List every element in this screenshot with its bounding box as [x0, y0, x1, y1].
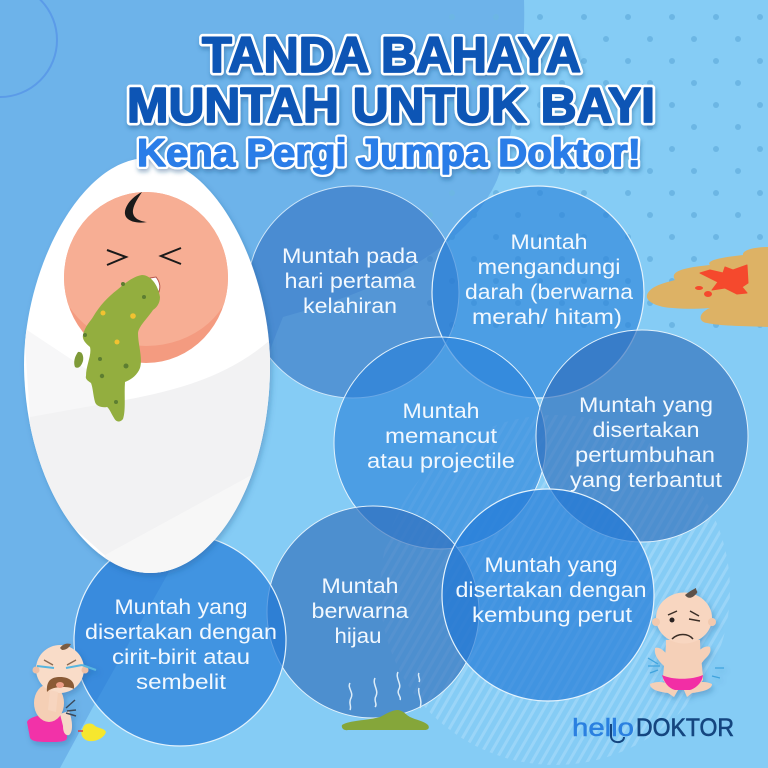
vomit drip — [74, 352, 83, 368]
potty — [27, 714, 67, 742]
subtitle outline: Kena Pergi Jumpa Doktor! — [137, 132, 641, 175]
head — [656, 592, 712, 644]
baby with bloated stomach — [648, 588, 724, 697]
face — [64, 192, 228, 363]
head — [36, 645, 84, 693]
stain: red on tan — [647, 247, 768, 327]
eyes and mouth — [668, 611, 700, 639]
text: hijau: hijau — [334, 625, 382, 648]
text: kembung: disertakan dengan — [456, 579, 646, 602]
face highlight above chin — [58, 192, 234, 346]
text: pertumbuhan: disertakan — [592, 419, 700, 442]
hair tuft — [60, 644, 71, 650]
circle: darah — [432, 186, 644, 398]
rubber duck — [78, 724, 106, 741]
text: cirit-birit: Muntah yang — [114, 596, 248, 619]
pain lines — [648, 658, 724, 678]
text: cirit-birit: sembelit — [136, 671, 226, 694]
hair — [125, 192, 147, 223]
vomit mound with steam — [342, 672, 429, 730]
text: hari pertama: kelahiran — [303, 295, 397, 318]
text: pertumbuhan: yang terbantut — [570, 469, 722, 492]
text: cirit-birit: cirit-birit atau — [112, 646, 250, 669]
text: darah: Muntah — [510, 231, 588, 254]
circle: kembung — [442, 489, 654, 701]
title line 1: TANDA BAHAYA — [202, 27, 581, 83]
decorative circle outline — [0, 0, 57, 97]
text: darah: mengandungi — [478, 256, 620, 279]
hair tuft — [685, 588, 697, 598]
circle: memancut — [334, 337, 546, 549]
vomit specks — [83, 282, 146, 404]
leg — [60, 711, 72, 735]
blanket left fold — [25, 330, 26, 342]
logo: helloDOKTOR: hello — [572, 714, 634, 742]
vomit — [83, 275, 160, 422]
subtitle: Kena Pergi Jumpa Doktor! — [137, 132, 641, 175]
blanket grey fold — [20, 340, 270, 560]
text: hijau: Muntah — [322, 575, 398, 598]
body — [34, 684, 64, 722]
circle: pertumbuhan — [536, 330, 748, 542]
logo: helloDOKTOR: DOKTOR — [636, 714, 734, 742]
title — [127, 27, 655, 175]
text: darah: darah (berwarna — [465, 281, 633, 304]
text: kembung: Muntah yang — [484, 554, 618, 577]
text: memancut: Muntah — [402, 400, 480, 423]
circle: hijau — [267, 506, 479, 718]
logo: helloDOKTOR — [572, 714, 734, 742]
mouth — [144, 277, 160, 294]
text: memancut: atau projectile — [367, 450, 515, 473]
title line 1 outline: TANDA BAHAYA — [202, 27, 581, 83]
dot pattern — [420, 0, 768, 340]
text: pertumbuhan: Muntah yang — [579, 394, 713, 417]
diaper — [662, 675, 703, 690]
stripe pattern — [380, 415, 730, 765]
crying baby on potty — [27, 644, 96, 742]
text: hari pertama: Muntah pada — [282, 245, 418, 268]
brows — [44, 660, 76, 665]
pain lines — [66, 700, 76, 716]
text: darah: merah/ hitam) — [472, 306, 622, 329]
text: memancut: memancut — [385, 425, 497, 448]
arms — [655, 647, 711, 673]
text: pertumbuhan: pertumbuhan — [575, 444, 715, 467]
blanket — [24, 158, 270, 573]
crying eyes and tears — [37, 665, 96, 670]
circle: hari pertama — [247, 186, 459, 398]
title line 2: MUNTAH UNTUK BAYI — [127, 79, 655, 133]
text: cirit-birit: disertakan dengan — [85, 621, 277, 644]
title line 2 outline: MUNTAH UNTUK BAYI — [127, 79, 655, 133]
background blob — [0, 0, 524, 768]
circle: cirit-birit — [74, 534, 286, 746]
arm — [48, 690, 58, 712]
legs — [650, 682, 712, 697]
blanket lower fold — [105, 476, 252, 573]
text: kembung: kembung perut — [472, 604, 632, 627]
text: hari pertama: hari pertama — [284, 270, 416, 293]
body — [663, 640, 703, 689]
text: hijau: berwarna — [312, 600, 409, 623]
mouth — [47, 677, 74, 692]
swaddled baby — [20, 158, 270, 575]
eyes — [107, 248, 181, 265]
